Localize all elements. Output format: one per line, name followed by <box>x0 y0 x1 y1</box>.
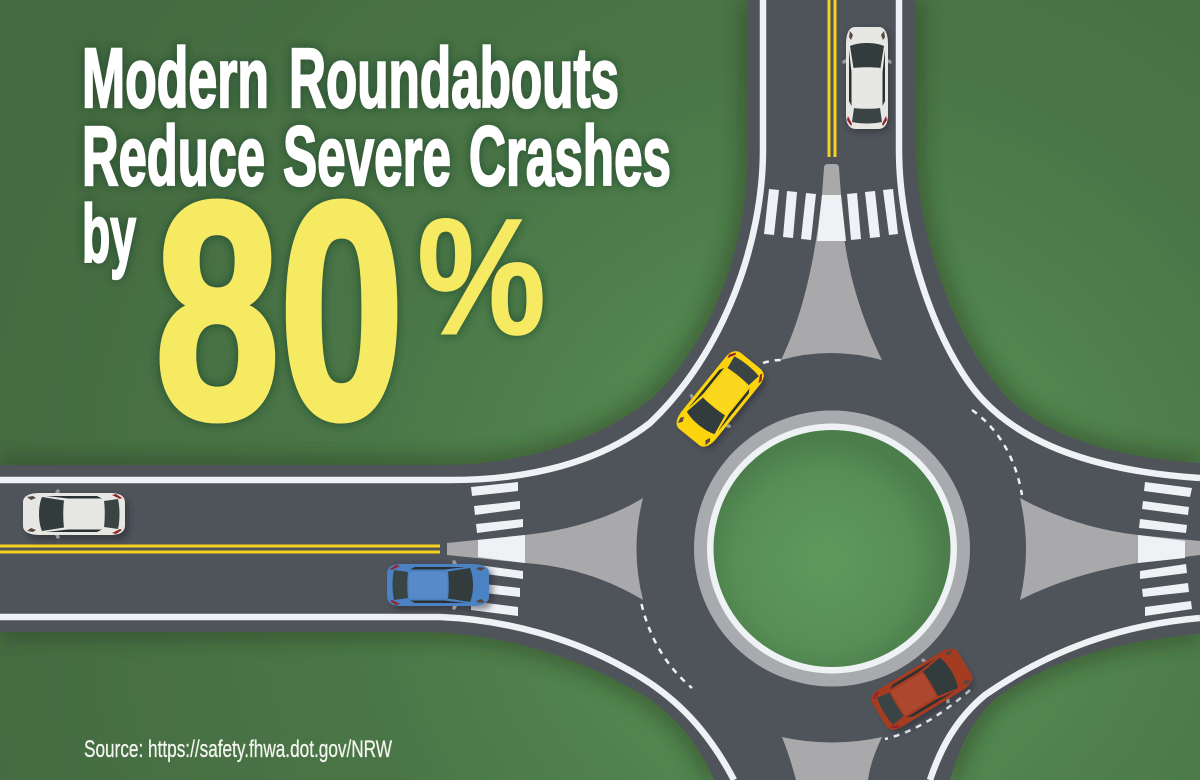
splitter island: south <box>782 737 882 780</box>
dashed yield lines <box>642 360 1022 739</box>
title: Roundabouts <box>289 31 619 125</box>
car: white, north road <box>842 27 892 132</box>
big number: 80%: 80 <box>155 139 404 483</box>
crosswalks <box>471 189 1192 616</box>
title: Modern <box>82 31 269 125</box>
title: Severe <box>283 109 451 203</box>
splitter island: west <box>447 498 643 600</box>
car: blue <box>387 560 493 610</box>
title <box>82 31 671 280</box>
car: yellow <box>669 344 771 454</box>
splitter island: north <box>781 164 882 360</box>
car: white, west road <box>23 489 129 540</box>
title: Reduce <box>82 109 265 203</box>
big number: 80%: % <box>417 185 546 370</box>
double yellow line: north road <box>828 0 836 157</box>
splitter island: east <box>1020 498 1200 600</box>
double yellow line: west road <box>0 544 440 554</box>
title: Crashes <box>469 109 671 203</box>
source: Source: https://safety.fhwa.dot.gov/NRW <box>84 736 392 763</box>
title: by <box>82 189 136 280</box>
central island <box>694 410 970 686</box>
car: red <box>866 641 978 737</box>
